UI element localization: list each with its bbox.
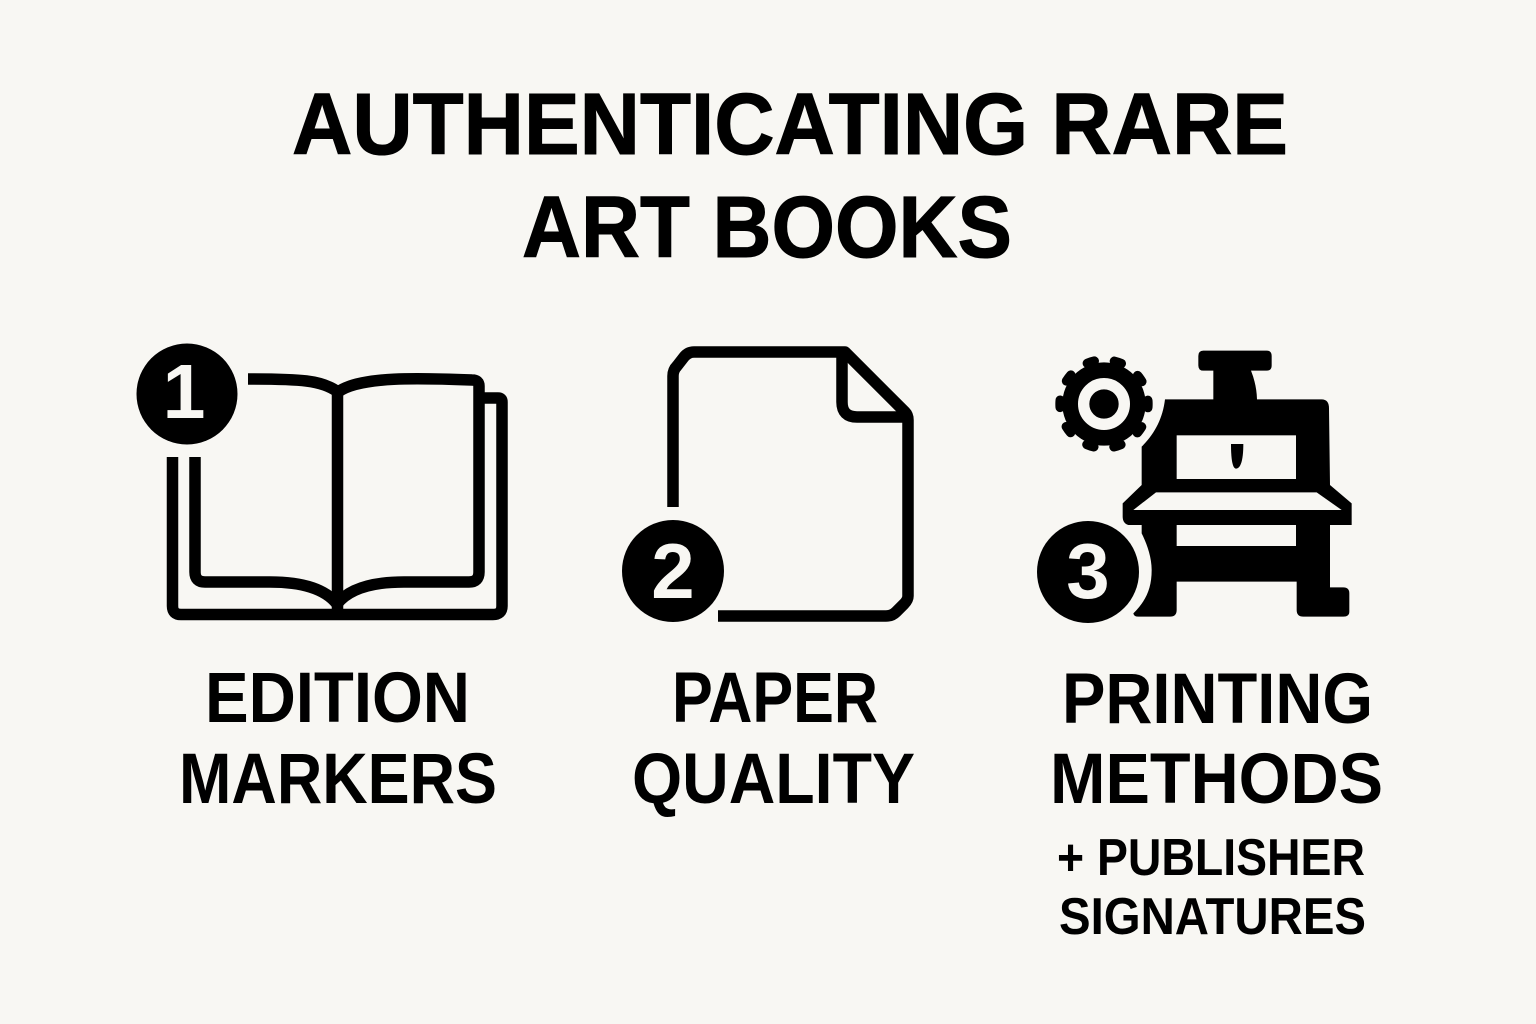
- badge: number 3: 3: [1066, 527, 1110, 615]
- label: publisher signatures: + PUBLISHER: [1057, 829, 1365, 887]
- title: ART BOOKS: [522, 179, 1012, 276]
- label: paper quality: [632, 659, 915, 819]
- badge: number 1: 1: [163, 349, 205, 435]
- badge: number 2: [622, 520, 724, 622]
- badge: number 3: [1037, 521, 1139, 623]
- badge: number 1: [136, 344, 238, 444]
- panel: printing methods: [1037, 351, 1383, 946]
- label: paper quality: PAPER: [672, 659, 878, 738]
- label: publisher signatures: SIGNATURES: [1059, 888, 1366, 946]
- icon: gear: [1056, 356, 1152, 452]
- panel: paper quality: [622, 352, 915, 819]
- title: [292, 76, 1288, 276]
- icon: open book: [172, 379, 502, 614]
- icon: paper sheet: [673, 352, 908, 616]
- label: edition markers: [179, 659, 497, 819]
- icon: printing press: [1123, 351, 1352, 617]
- label: publisher signatures: [1057, 829, 1366, 946]
- badge: number 2: 2: [651, 527, 695, 615]
- label: edition markers: MARKERS: [179, 740, 497, 819]
- label: printing methods: PRINTING: [1062, 660, 1373, 739]
- label: edition markers: EDITION: [205, 659, 470, 738]
- title: AUTHENTICATING RARE: [292, 76, 1288, 173]
- panel: edition markers: [136, 344, 502, 819]
- label: printing methods: METHODS: [1050, 740, 1383, 819]
- label: paper quality: QUALITY: [632, 740, 915, 819]
- label: printing methods: [1050, 660, 1383, 819]
